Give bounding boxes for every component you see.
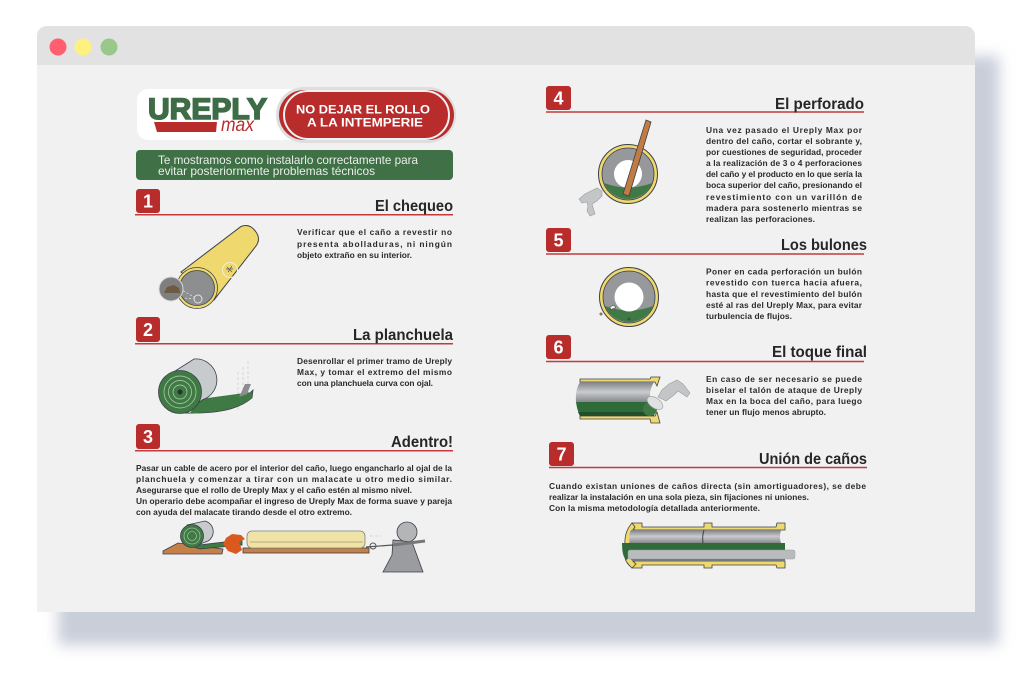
step 6 text: biselar el talón de ataque de Ureply bbox=[706, 385, 862, 395]
step 5 text: revestido con tuerca hacia afuera, bbox=[706, 278, 862, 288]
red window button bbox=[50, 38, 66, 56]
window shadow bbox=[58, 56, 999, 645]
step 4 text: Una vez pasado el Ureply Max por bbox=[706, 125, 863, 135]
warning text: NO DEJAR EL ROLLO bbox=[296, 102, 430, 116]
step 7 bbox=[549, 442, 867, 568]
step 6 title: El toque final bbox=[772, 344, 867, 361]
illustration: pipe section with bolts bbox=[600, 268, 658, 326]
step 4 number bbox=[546, 86, 571, 110]
step 2 bbox=[135, 317, 453, 414]
title bar bbox=[37, 26, 975, 65]
step 4 text: realizan las perforaciones. bbox=[706, 214, 815, 224]
step 4 text: revestimiento con un varillón de bbox=[706, 192, 862, 202]
step 5 text: esté al ras del Ureply Max, para evitar bbox=[706, 300, 863, 310]
step 3 number bbox=[136, 424, 160, 449]
step 1 title: El chequeo bbox=[375, 198, 453, 215]
step 6 number bbox=[546, 335, 571, 359]
step 4 text: por cuestiones de seguridad, proceder bbox=[706, 147, 863, 157]
step 6 text: En caso de ser necesario se puede bbox=[706, 374, 862, 384]
step 1 text: presenta abolladuras, ni ningún bbox=[297, 239, 452, 249]
step 2 text: con una planchuela curva con ojal. bbox=[297, 378, 433, 388]
step 3 text: planchuela y comenzar a tirar con un malacate u otro medio similar. bbox=[136, 474, 452, 484]
step 3 text: con ayuda del malacate tirando desde el otro extremo. bbox=[136, 507, 352, 517]
step 2 text: Max, y tomar el extremo del mismo bbox=[297, 367, 452, 377]
step 6 number: 6 bbox=[553, 338, 564, 358]
step 3 number: 3 bbox=[143, 427, 153, 447]
step 1 number: 1 bbox=[143, 192, 153, 212]
step 4 text: dentro del caño, cortar el sobrante y, bbox=[706, 136, 862, 146]
step 1 bbox=[135, 189, 453, 308]
step 1 text bbox=[297, 227, 452, 260]
intro text: Te mostramos como instalarlo correctamente para bbox=[158, 153, 418, 167]
step 3 bbox=[135, 424, 453, 572]
step 6 text bbox=[706, 374, 862, 417]
step 3 text bbox=[136, 463, 452, 517]
step 7 text: realizar la instalación en una sola pieza, sin fijaciones ni uniones. bbox=[549, 492, 809, 502]
step 6 text: tener un flujo menos abrupto. bbox=[706, 407, 826, 417]
step 1 text: objeto extraño en su interior. bbox=[297, 250, 412, 260]
step 4 text: boca superior del caño, presionando el bbox=[706, 180, 862, 190]
step 6 bbox=[546, 335, 867, 423]
step 7 text: Cuando existan uniones de caños directa (sin amortiguadores), se debe bbox=[549, 481, 866, 491]
browser window bbox=[37, 26, 975, 612]
warning badge: A LA INTEMPERIE bbox=[307, 116, 423, 130]
step 3 text: Pasar un cable de acero por el interior del caño, luego engancharlo al ojal de la bbox=[136, 463, 452, 473]
illustration: roll bbox=[158, 359, 253, 414]
logo red bar bbox=[154, 122, 217, 132]
step 6 text: Max en la boca del caño, para luego bbox=[706, 396, 862, 406]
step 3 text: Asegurarse que el rollo de Ureply Max y el caño estén al mismo nivel. bbox=[136, 485, 412, 495]
step 2 number: 2 bbox=[143, 320, 153, 340]
logo max: max bbox=[221, 115, 255, 136]
step 5 text: Poner en cada perforación un bulón bbox=[706, 266, 862, 276]
logo panel bbox=[137, 89, 302, 140]
step 3 text: Un operario debe acompañar el ingreso de Ureply Max de forma suave y pareja bbox=[136, 496, 452, 506]
yellow window button bbox=[74, 38, 92, 56]
step 4 text: madera para sostenerlo mientras se bbox=[706, 203, 862, 213]
intro banner: evitar posteriormente problemas técnicos bbox=[158, 164, 375, 178]
logo wordmark: UREPLY bbox=[148, 93, 267, 126]
step 1 text: Verificar que el caño a revestir no bbox=[297, 227, 452, 237]
illustration: pipe section with wooden rod and drill bbox=[579, 120, 658, 216]
step 5 bbox=[546, 228, 867, 326]
step 5 number: 5 bbox=[553, 230, 564, 250]
step 4 text: a la realización de 3 o 4 perforaciones bbox=[706, 158, 862, 168]
step 2 text bbox=[297, 356, 452, 388]
step 4 title: El perforado bbox=[775, 96, 864, 113]
step 4 bbox=[546, 86, 864, 224]
step 7 text: Con la misma metodología detallada anteriormente. bbox=[549, 503, 760, 513]
step 5 number bbox=[546, 228, 571, 252]
warning badge bbox=[276, 87, 456, 143]
illustration: pulling the roll through the pipe bbox=[163, 521, 425, 572]
intro banner bbox=[136, 150, 453, 180]
green window button bbox=[100, 38, 118, 56]
step 2 number bbox=[136, 317, 160, 342]
step 7 text bbox=[549, 481, 866, 513]
step 5 text bbox=[706, 266, 863, 321]
step 5 title: Los bulones bbox=[781, 237, 867, 254]
illustration: beveling the pipe mouth bbox=[576, 377, 690, 423]
step 7 number bbox=[549, 442, 574, 466]
step 1 number bbox=[136, 189, 160, 213]
step 2 title: La planchuela bbox=[353, 327, 453, 344]
illustration: joined pipes bbox=[622, 523, 795, 568]
step 4 text: del caño y el producto en lo que sería la bbox=[706, 169, 862, 179]
illustration: yellow pipe bbox=[159, 226, 258, 308]
step 5 text: turbulencia de flujos. bbox=[706, 311, 792, 321]
step 7 number: 7 bbox=[556, 444, 567, 464]
step 4 text bbox=[706, 125, 863, 224]
step 5 text: hasta que el revestimiento del bulón bbox=[706, 289, 862, 299]
step 4 number: 4 bbox=[553, 88, 564, 108]
step 2 text: Desenrollar el primer tramo de Ureply bbox=[297, 356, 452, 366]
step 7 title: Unión de caños bbox=[759, 451, 867, 468]
step 3 title: Adentro! bbox=[391, 434, 453, 451]
